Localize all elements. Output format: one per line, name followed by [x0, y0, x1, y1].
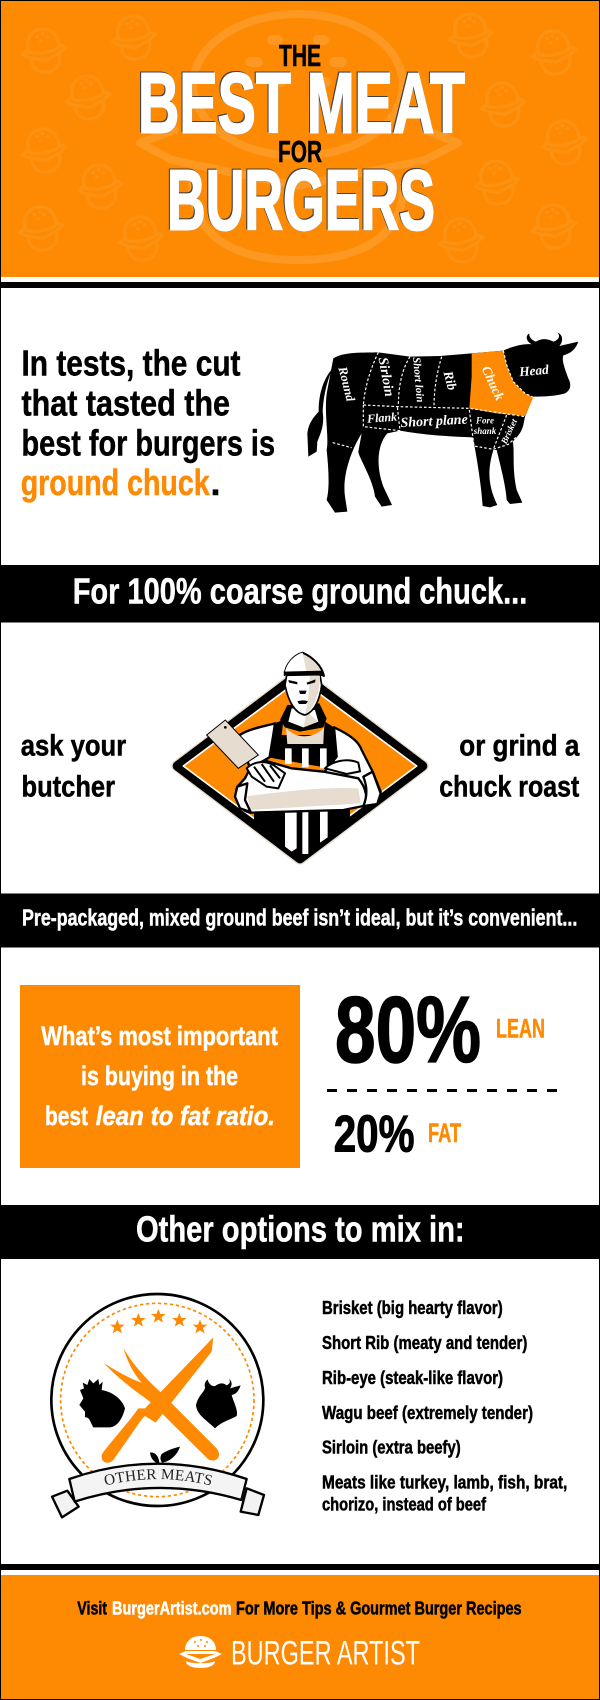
cut labels: Short loin [410, 357, 426, 403]
cut labels [335, 356, 550, 446]
options list: Short Rib (meaty and tender) [322, 1333, 527, 1353]
intro text [21, 343, 275, 503]
callout box: What’s most important [41, 1021, 278, 1051]
band: other options: Other options to mix in: [136, 1209, 465, 1250]
cut labels: Short plane [400, 413, 468, 431]
callout box: lean to fat ratio. [96, 1101, 275, 1131]
panel: footer [0, 1575, 600, 1700]
cut labels: Chuck [479, 363, 508, 403]
burger watermark pattern [16, 10, 590, 266]
stat: 80 percent lean: LEAN [496, 1014, 545, 1044]
cow tail [307, 368, 333, 457]
footer call to action [77, 1598, 522, 1618]
panel: other options [50, 1292, 567, 1518]
title [138, 39, 465, 248]
emblem circles [51, 1294, 263, 1506]
intro text: . [210, 462, 221, 503]
beef cuts diagram [307, 333, 578, 513]
header double rule [0, 282, 600, 288]
cut labels: Round [335, 364, 358, 403]
cut labels: Brisket [498, 417, 519, 446]
title: BURGERS [167, 154, 435, 248]
panel: butcher [21, 653, 580, 859]
apron bib [268, 720, 337, 768]
ask your butcher text: butcher [22, 771, 115, 804]
other meats emblem [50, 1292, 266, 1518]
callout box [20, 985, 300, 1168]
options list: Rib-eye (steak-like flavor) [322, 1368, 503, 1388]
crossed forearms [236, 761, 366, 813]
stat: 20 percent fat: 20% [334, 1106, 414, 1164]
options list: Brisket (big hearty flavor) [322, 1298, 503, 1318]
or grind text: or grind a [459, 729, 580, 762]
band: coarse ground chuck [0, 565, 600, 622]
cut labels: Head [518, 362, 550, 379]
cleaver [207, 720, 258, 768]
right hand [325, 760, 360, 774]
intro text: that tasted the [22, 382, 230, 423]
panel: header [0, 0, 600, 277]
cut labels: Flank [366, 410, 397, 426]
footer call to action: Visit [77, 1598, 107, 1618]
cut labels: Fore [475, 416, 494, 426]
brand name: BURGER ARTIST [231, 1634, 420, 1672]
ask your butcher text [21, 729, 126, 804]
callout box: best [45, 1101, 88, 1131]
panel: lean to fat ratio [20, 977, 558, 1168]
ribbon [69, 1464, 247, 1502]
diamond badge [177, 673, 423, 859]
ask your butcher text: ask your [21, 729, 126, 762]
footer call to action: BurgerArtist.com [112, 1598, 232, 1618]
options list [322, 1298, 567, 1514]
footer call to action: For More Tips & Gourmet Burger Recipes [236, 1598, 522, 1618]
cut labels: shank [473, 426, 497, 436]
right shoulder [323, 727, 381, 792]
band: other options [0, 1205, 600, 1259]
panel: ground chuck intro [21, 333, 578, 513]
intro text: best for burgers is [22, 422, 275, 463]
rooster [79, 1379, 125, 1427]
stars [110, 1309, 207, 1333]
leaves [150, 1447, 180, 1464]
chuck highlight [469, 351, 533, 416]
stat: 80 percent lean: 80% [335, 977, 481, 1082]
neck collar [280, 703, 327, 732]
face [285, 675, 322, 715]
cut lines [333, 351, 533, 449]
options list: chorizo, instead of beef [322, 1494, 487, 1514]
large burger watermark [140, 14, 458, 260]
left shoulder [237, 723, 275, 768]
cut labels: Rib [440, 368, 460, 392]
carving fork [104, 1348, 219, 1460]
title: THE [279, 39, 321, 73]
cow head [196, 1379, 241, 1428]
ribbon tails [52, 1488, 264, 1517]
butcher badge [177, 653, 423, 859]
fist [247, 762, 285, 788]
band: pre-packaged [0, 894, 600, 948]
intro text: In tests, the cut [22, 343, 241, 384]
hat [285, 653, 324, 676]
apron lower [254, 807, 350, 857]
right sleeve [363, 772, 381, 806]
intro text: ground chuck [21, 462, 210, 503]
or grind text [439, 729, 580, 804]
knife [102, 1337, 213, 1463]
left sleeve [235, 783, 251, 812]
options list: Sirloin (extra beefy) [322, 1438, 461, 1458]
ribbon text: OTHER MEATS [104, 1469, 212, 1485]
title: FOR [278, 135, 322, 169]
callout box: is buying in the [81, 1061, 238, 1091]
options list: Wagu beef (extremely tender) [322, 1403, 533, 1423]
cut labels: Sirloin [375, 356, 396, 398]
stat: 20 percent fat: FAT [428, 1118, 461, 1148]
footer double rule [0, 1564, 600, 1570]
icon: burger [179, 1636, 222, 1668]
cow silhouette [326, 333, 578, 513]
